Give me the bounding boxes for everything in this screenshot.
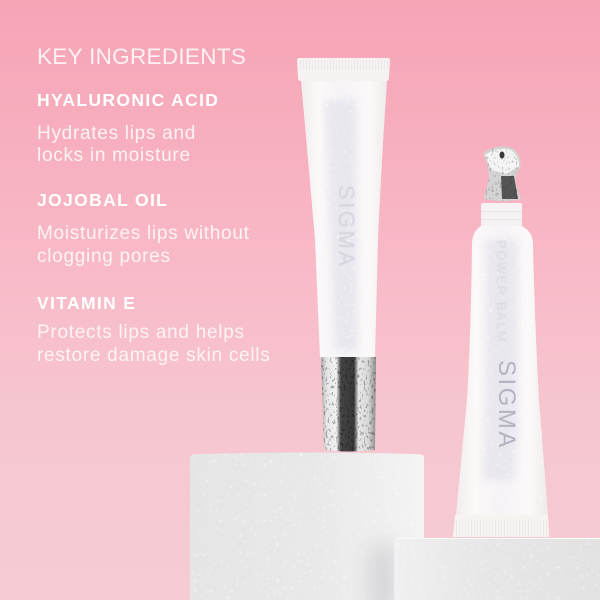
ingredient: jojobal oil: JOJOBAL OIL (37, 190, 168, 210)
crimped end (453, 515, 549, 537)
metal applicator (483, 146, 521, 201)
ingredient: hyaluronic acid: locks in moisture (37, 145, 191, 166)
ingredient: vitamin e: restore damage skin cells (37, 345, 270, 366)
tube body (456, 226, 548, 515)
tube crimped end (297, 58, 390, 81)
tube body (300, 81, 388, 358)
threaded neck (481, 203, 522, 227)
product: lip tube with metal applicator (453, 143, 549, 537)
tube logo: SIGMA (493, 360, 520, 450)
faint tube logo: SIGMA (334, 185, 359, 268)
ingredient: jojobal oil: Moisturizes lips without (37, 223, 250, 244)
ingredient: hyaluronic acid (37, 90, 219, 166)
pedestal: large cylinder (190, 451, 424, 600)
product scene (190, 58, 600, 600)
ingredient: vitamin e: Protects lips and helps (37, 322, 245, 343)
product: lip tube standing, cap down (297, 58, 390, 452)
pedestal: small block (394, 538, 600, 600)
ingredient: hyaluronic acid: HYALURONIC ACID (37, 90, 219, 110)
heading: KEY INGREDIENTS (37, 44, 246, 69)
ingredient: jojobal oil (37, 190, 250, 267)
ingredient: hyaluronic acid: Hydrates lips and (37, 123, 196, 144)
silver cap (321, 357, 376, 452)
ingredient: jojobal oil: clogging pores (37, 246, 171, 267)
ingredient: vitamin e: VITAMIN E (37, 293, 136, 313)
faint tube sub logo: POWER BALM (494, 240, 509, 343)
ingredient: vitamin e (37, 293, 270, 366)
